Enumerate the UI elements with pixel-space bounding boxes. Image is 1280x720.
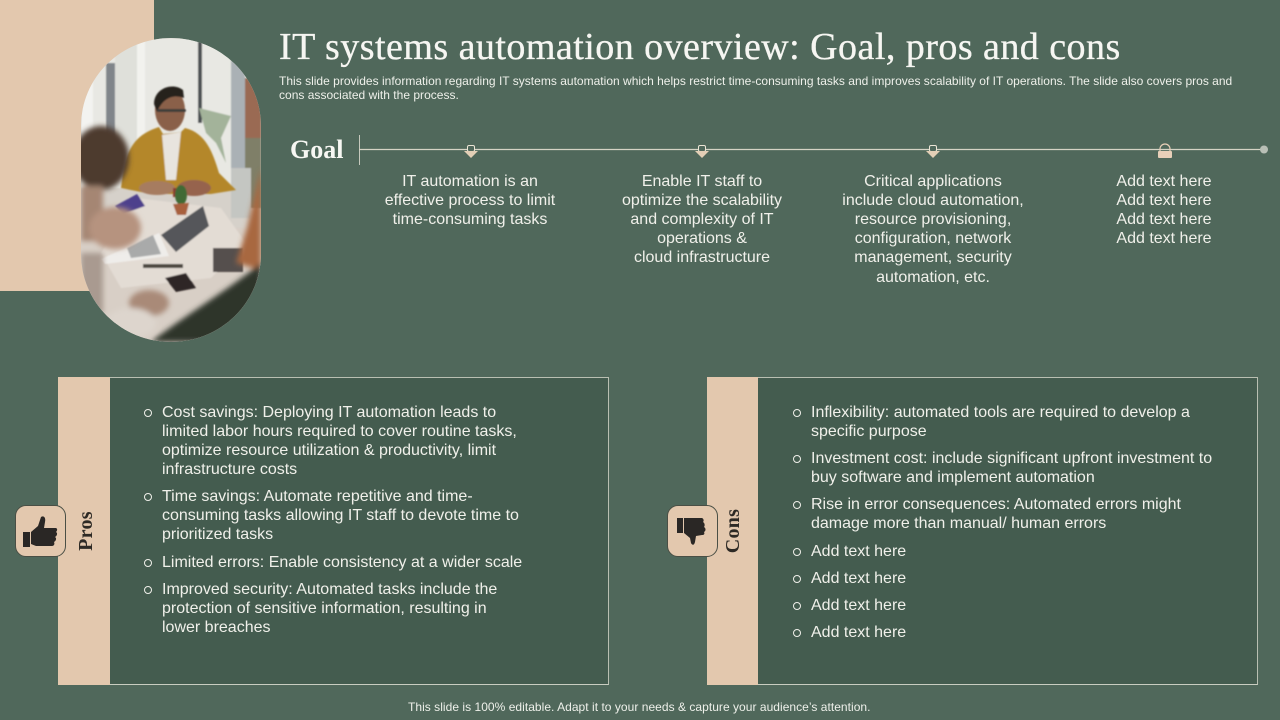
cons item 3: Rise in error consequences: Automated errors might — [811, 496, 1181, 513]
goal text 3 — [842, 173, 1024, 286]
cons item 3 — [811, 495, 1181, 533]
cons item 1: Inflexibility: automated tools are required to develop a — [811, 404, 1190, 421]
cons item 7: Add text here — [811, 624, 906, 641]
pros item 1: optimize resource utilization & productivity, limit — [162, 442, 496, 459]
goal text 4 — [1116, 173, 1212, 247]
cons item 2: buy software and implement automation — [811, 469, 1095, 486]
pros item 3: Limited errors: Enable consistency at a wider scale — [162, 554, 522, 571]
corner block — [0, 0, 154, 291]
goal text 2 — [622, 173, 782, 266]
cons label: Cons — [722, 509, 744, 553]
goal text 4: Add text here — [1116, 192, 1212, 209]
panel: pros — [15, 377, 609, 685]
pros item 4: lower breaches — [162, 619, 270, 636]
cons strip — [707, 377, 758, 685]
goal text 3: include cloud automation, — [842, 192, 1024, 209]
cons item 6: Add text here — [811, 597, 906, 614]
goal text 2: Enable IT staff to — [642, 173, 762, 190]
plant — [175, 185, 187, 205]
pros item 2: Time savings: Automate repetitive and time- — [162, 488, 473, 505]
table objects — [101, 198, 246, 288]
goal text 1: effective process to limit — [385, 192, 555, 209]
goal text 3: resource provisioning, — [855, 211, 1011, 228]
cons item 1 — [811, 403, 1190, 441]
goal text 2: operations & — [657, 230, 747, 247]
footer note: This slide is 100% editable. Adapt it to your needs & capture your audience’s attention. — [408, 700, 870, 714]
blurred foreground people — [73, 126, 129, 190]
goal text 2: cloud infrastructure — [634, 249, 770, 266]
photo: team meeting — [81, 38, 261, 342]
cons badge with thumbs down icon — [667, 505, 718, 557]
goal text 2: optimize the scalability — [622, 192, 782, 209]
marker 1 — [464, 146, 478, 158]
goal text 4: Add text here — [1116, 230, 1212, 247]
goal timeline — [359, 135, 1268, 165]
cons item 4: Add text here — [811, 543, 906, 560]
cons item 3: damage more than manual/ human errors — [811, 515, 1106, 532]
pros content box — [58, 377, 609, 685]
pros item 1: limited labor hours required to cover routine tasks, — [162, 423, 517, 440]
cons item 2: Investment cost: include significant upfront investment to — [811, 450, 1212, 467]
heading: Goal: Goal — [290, 135, 343, 164]
pros item 4: Improved security: Automated tasks include the — [162, 581, 497, 598]
marker 3 — [926, 146, 940, 158]
pros item 4 — [162, 580, 497, 638]
timeline end dot — [1260, 146, 1268, 154]
pros badge with thumbs up icon — [15, 505, 66, 557]
goal text 4: Add text here — [1116, 211, 1212, 228]
pros list — [144, 404, 522, 636]
laptop — [161, 206, 209, 252]
pros item 2 — [162, 487, 519, 544]
pros strip — [58, 377, 110, 685]
goal text 3: management, security — [854, 249, 1012, 266]
goal text 1: time-consuming tasks — [393, 211, 547, 228]
subtitle: This slide provides information regarding IT systems automation which helps restrict time-consuming tasks and improves scalability of IT operations. The slide also covers pros and — [279, 74, 1232, 88]
pros item 4: protection of sensitive information, resulting in — [162, 600, 487, 617]
man — [121, 127, 236, 194]
marker 2 — [695, 146, 709, 158]
cons item 5: Add text here — [811, 570, 906, 587]
goal text 1 — [385, 173, 556, 228]
goal text 2: and complexity of IT — [630, 211, 774, 228]
cons item 2 — [811, 449, 1212, 487]
cons content box — [707, 377, 1258, 685]
pros item 1: Cost savings: Deploying IT automation leads to — [162, 404, 496, 421]
pros item 2: prioritized tasks — [162, 526, 273, 543]
pros item 2: consuming tasks allowing IT staff to devote time to — [162, 507, 519, 524]
subtitle — [279, 74, 1232, 102]
pros item 1 — [162, 403, 517, 479]
cons item 1: specific purpose — [811, 423, 927, 440]
cons list — [793, 404, 1212, 641]
panel: cons — [667, 377, 1258, 685]
goal text 3: Critical applications — [864, 173, 1002, 190]
title: IT systems automation overview: Goal, pros and cons — [279, 26, 1121, 68]
goal text 3: automation, etc. — [876, 269, 990, 286]
marker 4 — [1158, 144, 1172, 158]
pros label: Pros — [75, 511, 97, 551]
pros item 1: infrastructure costs — [162, 461, 297, 478]
goal text 1: IT automation is an — [402, 173, 538, 190]
goal text 4: Add text here — [1116, 173, 1212, 190]
subtitle: cons associated with the process. — [279, 88, 459, 102]
goal text 3: configuration, network — [855, 230, 1011, 247]
